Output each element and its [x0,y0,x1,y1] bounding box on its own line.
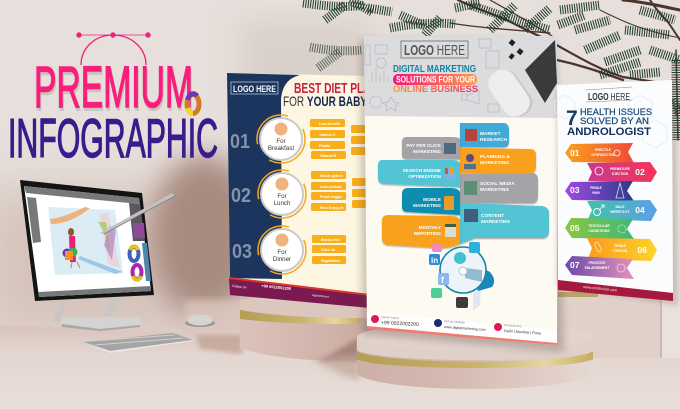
arrow 01 erectile dysfunction: ERECTILE [595,148,611,152]
social media icons: in [431,256,438,265]
mouse [185,314,215,327]
food pills: Fresh veggie [320,195,342,199]
arrow 03 penile pain: PAIN [592,191,600,195]
tree branches and foliage [303,0,680,140]
arrow 02 premature ejection [587,162,657,182]
heading: health issues [566,107,652,138]
logo [586,87,632,103]
crimson footer: www.smiths4all.com [583,285,617,293]
heading: premium: PREMIUM [34,55,193,120]
social media icons [429,242,480,308]
title: Premium Infographic [8,33,218,169]
stylus pen [100,193,175,234]
binder clips [509,39,524,60]
arrow 02 premature ejection: 02 [635,167,645,177]
arrow 03 penile pain [565,181,634,201]
meal step 02 lunch: For [277,193,287,200]
block: market research [460,123,509,147]
food pills: Low-fat milk [319,122,340,126]
meal step 02 lunch [231,170,306,218]
poster: health issues [555,80,678,306]
food pills: Vegetables [321,259,340,263]
meal step 03 dinner: Dinner [273,256,291,263]
monitor screen [20,180,154,301]
arrow 04 male infertility: INFERTILITY [610,210,631,214]
poster shadow [556,84,678,306]
block: planning and marketing: PLANNING & [480,154,510,160]
logo: LOGO HERE [588,92,630,103]
grey header [364,36,557,118]
block: content marketing [460,203,549,244]
computer mouse [483,64,538,122]
heading: digital marketing: ONLINE BUSINESS [393,83,478,94]
food pills: Whole grains [320,174,343,178]
block: search engine optimization: SEARCH ENGINE [403,168,441,173]
arrow 02 premature ejection: EJECTION [612,172,629,176]
podium: large centre cylinder [310,323,593,389]
contact footer: Our Branches [504,323,522,328]
footer band [229,277,370,308]
heading: health issues: 7 [566,107,578,130]
meal step 03 dinner [232,226,306,274]
block: content marketing: MARKETING [481,219,510,225]
heading: diet plan: FOR YOUR BABY [283,93,367,109]
poster: best diet plan [227,73,378,308]
heading: health issues: SOLVED BY AN [580,116,649,126]
block: social media marketing: MARKETING [480,187,509,193]
arrow 04 male infertility: 04 [635,205,645,215]
block: pay per click [402,137,460,159]
contact footer [367,312,557,345]
arrow 06 penile torsion [587,238,657,261]
crimson footer [558,280,673,301]
heading: diet plan [283,80,378,109]
heading: health issues: ANDROLOGIST [567,126,652,138]
block: monthly reporting: MONTHLY [419,225,441,230]
food pills: Olive oil [321,248,335,252]
food pills: Vitamin E [320,154,337,158]
heading: digital marketing: SOLUTIONS FOR YOUR [396,74,476,84]
heading: health issues: HEALTH ISSUES [580,107,652,117]
heading: premium [34,55,194,123]
notebook [525,40,557,103]
block: market research: MARKET [480,131,501,137]
arrow 02 premature ejection: PREMATURE [610,167,630,171]
footer band: +99 0022002200 [261,283,292,291]
contact footer: Call for Inquiry [381,315,400,320]
podium: right back cylinder [558,285,680,358]
block: search engine optimization: OPTIMIZATION [408,174,442,179]
arrow 05 testicular conditions [565,218,634,239]
food pills [310,119,367,264]
food pills: Rice & yogurt [320,206,344,210]
header doodles [365,39,499,112]
block: social media marketing: SOCIAL MEDIA [480,181,515,187]
footer band: Appointment [312,293,329,299]
needle clusters [303,0,680,140]
block: content marketing: CONTENT [481,213,504,219]
contact footer: www.digitalmarketing.com [444,325,486,332]
icon: colour wheel on title [187,94,199,114]
contact footer: Delhi | Mumbai | Pune [504,329,541,336]
arrow 06 penile torsion: 06 [638,245,647,255]
meal step 03 dinner: For [277,249,287,256]
heading: diet plan: BEST DIET PLAN [294,80,378,97]
heading: digital marketing [393,64,478,94]
arrow 06 penile torsion: TORSION [613,249,628,253]
poster shadow [360,40,564,352]
contact footer: +99 0022002200 [381,320,419,328]
bezier curve handle icon [77,33,150,65]
hexagon background pattern [555,95,667,148]
colour wheels on screen [130,246,142,280]
poster: digital marketing [360,36,564,352]
arrow 01 erectile dysfunction: 01 [570,148,580,158]
desktop computer illustration [20,180,215,353]
background wall and floor [0,30,358,356]
navy panel [227,73,300,279]
food pills: Vitamin C [319,133,336,137]
contact footer: Visit our Website [444,319,465,324]
logo box: LOGO HERE [404,42,465,59]
megaphone illustration [440,247,494,311]
meal step 01 breakfast [230,115,305,163]
arrow 05 testicular conditions: CONDITIONS [588,229,610,233]
poster sheet [364,36,557,345]
block: monthly reporting: REPORTING [414,231,441,236]
arrow 01 erectile dysfunction [565,143,634,163]
food pills: Brown rice [321,238,340,242]
block: planning and marketing [460,147,536,173]
arrow 07 prostate enlargement [565,256,634,279]
podium: left small cylinder [240,300,400,362]
arrow 03 penile pain: PENILE [590,186,602,190]
arrow 07 prostate enlargement: PROSTATE [589,261,605,265]
block: monthly reporting [382,215,460,248]
poster sheet [227,73,370,300]
food pills: Potato [319,144,331,148]
social media icons: f [441,275,445,285]
arrow 03 penile pain: 03 [570,185,580,195]
block: search engine optimization [378,160,460,187]
block: mobile marketing [402,188,460,215]
block: social media marketing [460,173,538,203]
meal step 01 breakfast: For [276,138,286,145]
meal step 01 breakfast: Breakfast [268,145,294,152]
block: market research: RESEARCH [480,137,507,143]
arrow 07 prostate enlargement: 07 [570,260,580,270]
block: pay per click: MARKETING [413,149,441,154]
branches [450,0,680,140]
monitor stand and base [53,298,141,331]
block: mobile marketing: MOBILE [423,197,441,202]
logo box: LOGO HERE [233,84,276,95]
heading: infographic: INFOGRAPHIC [8,107,218,169]
heading: premium: PREMIUM [35,58,194,123]
arrow 05 testicular conditions: TESTICULAR [588,224,610,228]
meal step 02 lunch: Lunch [274,200,291,207]
meal step 01 breakfast: 01 [230,131,250,153]
arrow 07 prostate enlargement: ENLARGEMENT [585,266,609,270]
block: pay per click: PAY PER CLICK [406,143,442,148]
poster sheet [557,80,673,300]
logo box [231,82,278,95]
meal step 02 lunch: 02 [231,185,251,207]
block: planning and marketing: MARKETING [480,160,509,166]
arrow 04 male infertility [587,200,657,221]
arrow 06 penile torsion: PENILE [614,244,626,248]
artwork on screen [48,207,123,275]
heading: digital marketing: DIGITAL MARKETING [393,64,476,75]
food pills: Lean protein [320,185,342,189]
arrow 01 erectile dysfunction: DYSFUNCTION [591,153,615,157]
arrow 04 male infertility: MALE [615,205,625,209]
block: mobile marketing: MARKETING [413,203,441,208]
footer band: Follow on [232,284,247,290]
meal step 03 dinner: 03 [232,241,252,263]
arrow 05 testicular conditions: 05 [570,223,580,233]
keyboard [83,333,193,353]
